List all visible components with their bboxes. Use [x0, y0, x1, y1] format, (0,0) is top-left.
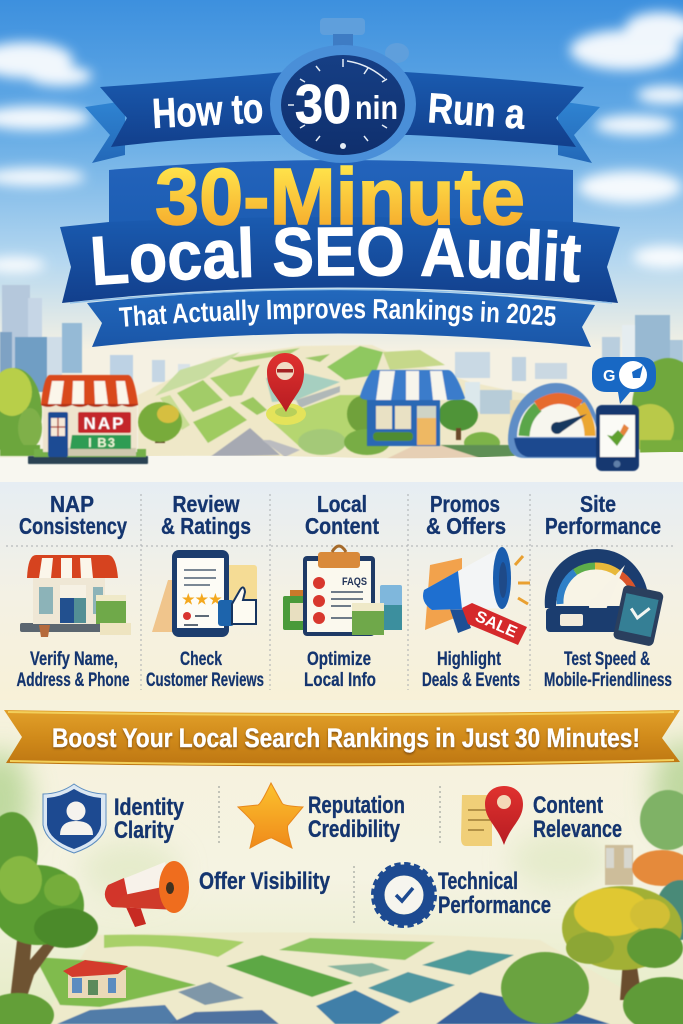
bushes and trees in landscape	[0, 358, 683, 462]
right trees	[501, 790, 683, 1024]
icon: phone with stars and thumbs up: ★★★	[182, 591, 223, 607]
benefit: Reputation Credibility: Credibility	[308, 816, 401, 843]
NAP storefront: NAP	[84, 414, 125, 433]
checklist panel background	[0, 482, 683, 710]
icon: megaphone and sale tag: SALE	[472, 608, 520, 642]
column: Review & Ratings: & Ratings	[161, 513, 251, 539]
lower background	[0, 700, 683, 1024]
column: Local Content: Optimize	[307, 649, 371, 670]
column: Review & Ratings	[146, 491, 264, 691]
column: NAP Consistency: NAP	[50, 491, 94, 517]
icon: shield	[43, 784, 106, 853]
stopwatch	[270, 18, 416, 163]
column: Site Performance: Site	[580, 491, 616, 517]
heading: Local SEO Audit: Local SEO Audit	[92, 226, 581, 286]
benefit: Content Relevance: Content	[533, 792, 603, 819]
column: Review & Ratings: Review	[172, 491, 240, 517]
icon: star	[238, 783, 303, 848]
icon: megaphone and sale tag	[423, 547, 530, 645]
stopwatch number: 30	[295, 73, 351, 135]
top ribbon	[100, 72, 584, 147]
benefit: Content Relevance	[461, 786, 622, 846]
icon: red megaphone	[105, 861, 189, 927]
stopwatch number	[295, 73, 398, 135]
heading: 30-Minute: 30-Minute	[155, 152, 525, 241]
column: Local Content	[283, 491, 402, 691]
column: Site Performance: Test Speed &	[564, 649, 650, 670]
column: Site Performance: Performance	[545, 513, 661, 539]
speed gauge and phone	[508, 383, 639, 471]
stopwatch number: nin	[355, 89, 398, 126]
benefit: Content Relevance: Relevance	[533, 816, 622, 843]
left trees	[0, 812, 98, 1024]
benefit: Offer Visibility	[105, 861, 331, 927]
subtitle: That Actually Improves Rankings in 2025	[118, 298, 556, 327]
column: Review & Ratings: Check	[180, 649, 222, 670]
top ribbon tails	[85, 101, 600, 163]
central title block	[109, 160, 573, 250]
G search bubble: G	[603, 368, 615, 385]
column: Review & Ratings: Customer Reviews	[146, 670, 264, 691]
benefit dividers	[219, 786, 440, 926]
benefit: Technical Performance: Performance	[438, 892, 551, 919]
column: NAP Consistency	[16, 491, 131, 691]
icon: phone with stars and thumbs up	[152, 550, 257, 637]
small red-roof house	[63, 960, 128, 998]
column: Promos & Offers: Highlight	[437, 649, 502, 670]
G search bubble	[592, 357, 656, 404]
column: Promos & Offers: Deals & Events	[422, 670, 520, 691]
clouds	[0, 12, 683, 273]
heading: Run a: Run a	[426, 84, 527, 138]
column: Local Content: Content	[305, 513, 379, 539]
map pin with ring	[266, 353, 306, 425]
column: Promos & Offers: & Offers	[426, 513, 506, 539]
column: Promos & Offers	[422, 491, 530, 691]
icon: FAQ clipboard	[283, 546, 402, 636]
icon: gear with check	[374, 865, 434, 925]
benefit: Reputation Credibility	[238, 783, 405, 848]
column: Local Content: Local Info	[304, 670, 376, 691]
icon: FAQ clipboard: FAQS	[342, 576, 367, 588]
heading: How to: How to	[151, 84, 264, 137]
benefit: Identity Clarity: Clarity	[114, 817, 175, 844]
benefit: Reputation Credibility: Reputation	[308, 792, 405, 819]
benefit: Technical Performance	[374, 865, 551, 925]
column: Promos & Offers: Promos	[430, 491, 500, 517]
column: Site Performance	[544, 491, 672, 691]
bottom ribbon	[87, 290, 595, 347]
side green washes	[0, 740, 683, 900]
column: NAP Consistency: Verify Name,	[30, 649, 118, 670]
bottom road map	[35, 932, 683, 1024]
icon: gauge and tablet	[545, 549, 664, 647]
gold banner	[4, 710, 680, 766]
column: NAP Consistency: Consistency	[19, 513, 127, 539]
column: NAP Consistency: Address & Phone	[16, 670, 130, 691]
wide title band	[60, 217, 620, 303]
benefit: Identity Clarity: Identity	[114, 794, 185, 821]
benefit: Identity Clarity	[43, 784, 185, 853]
benefit: Offer Visibility: Offer Visibility	[199, 868, 331, 895]
column: Local Content: Local	[317, 491, 367, 517]
NAP storefront	[28, 375, 148, 464]
NAP storefront: I B3	[88, 435, 116, 450]
white wave divider	[0, 452, 683, 484]
blue storefront	[360, 370, 465, 446]
panel dividers	[6, 494, 676, 690]
icon: note with pin	[461, 786, 523, 846]
sky background	[0, 0, 683, 480]
benefit: Technical Performance: Technical	[438, 868, 518, 895]
icon: storefront	[20, 555, 131, 637]
map landscape	[138, 345, 530, 458]
city skyline	[0, 285, 683, 392]
